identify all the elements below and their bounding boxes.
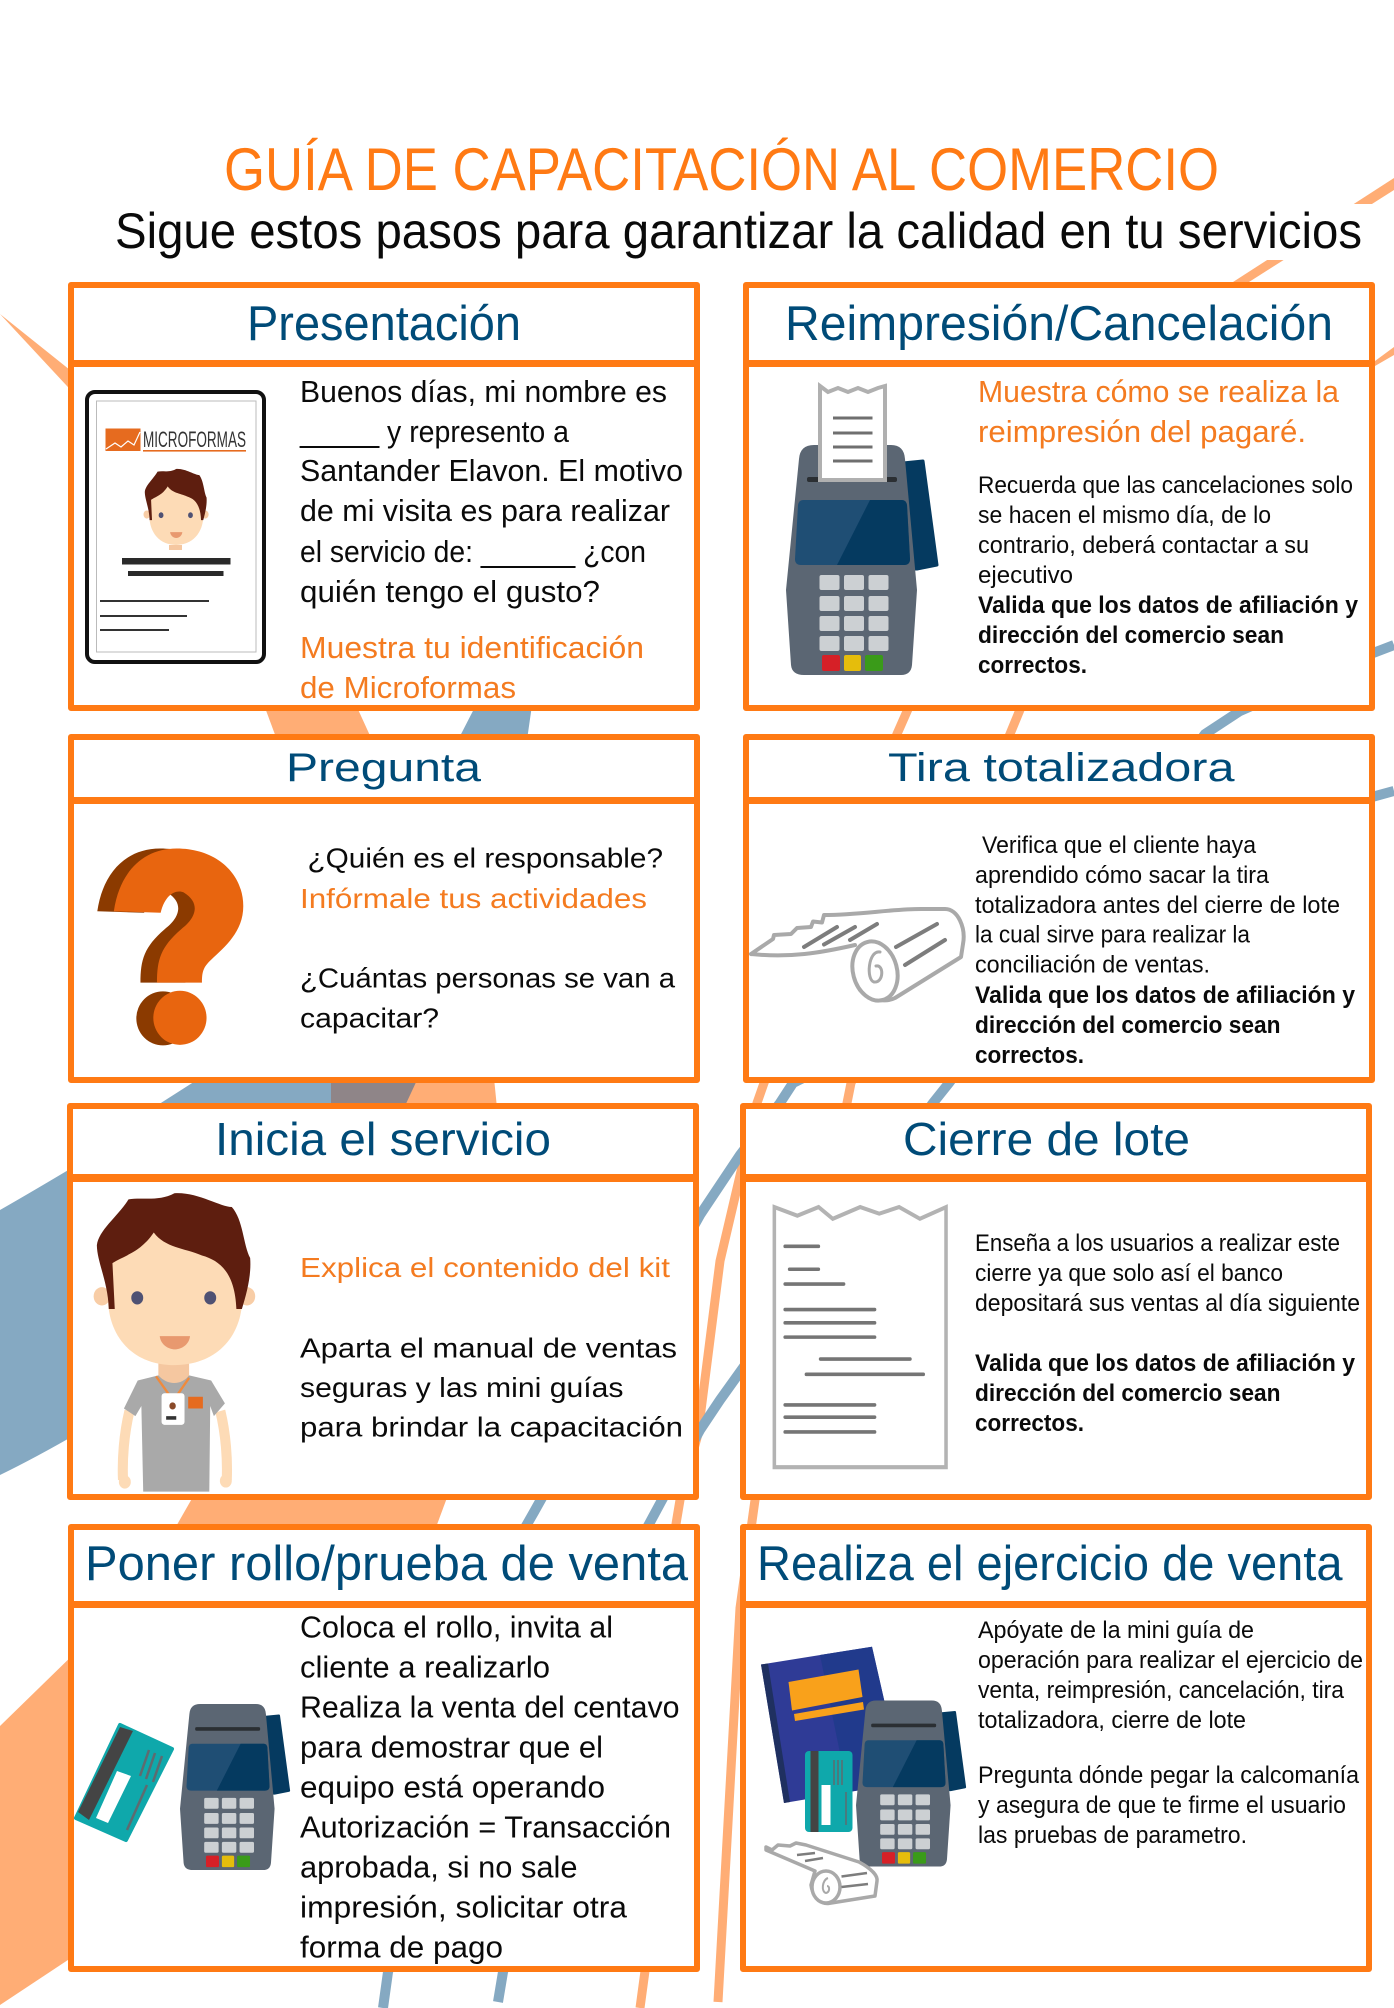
text: sale exercise: Pregunta dónde pegar la calcomanía — [978, 1762, 1360, 1789]
text: kit explanation: seguras y las mini guías — [300, 1372, 624, 1403]
text: roll and test sale: Realiza la venta del centavo — [300, 1690, 680, 1724]
icon: terminal — [180, 1704, 289, 1870]
icon: terminal with receipt — [786, 386, 937, 675]
panel: Cierre de lote — [740, 1106, 1372, 1497]
icon: receipt — [774, 1207, 946, 1467]
text: reprint instructions: dirección del comercio sean — [978, 622, 1284, 649]
icon: ID card — [87, 392, 264, 662]
text: roll and test sale: Autorización = Transacción — [300, 1810, 671, 1844]
text: roll instructions: totalizadora antes del cierre de lote — [975, 892, 1340, 919]
text: reprint instructions: reimpresión del pagaré. — [978, 414, 1306, 449]
icon: kit with guide, card, terminal and roll — [761, 1647, 965, 1904]
text: sale exercise: y asegura de que te firme el usuario — [978, 1792, 1346, 1819]
text: batch close instructions: Enseña a los usuarios a realizar este — [975, 1230, 1340, 1257]
text: sale exercise: totalizadora, cierre de lote — [978, 1707, 1246, 1734]
text: roll and test sale: cliente a realizarlo — [300, 1650, 550, 1684]
text: roll instructions: conciliación de ventas. — [975, 952, 1210, 978]
text: sale exercise: Apóyate de la mini guía de — [978, 1617, 1254, 1644]
text: reprint instructions: Recuerda que las cancelaciones solo — [978, 472, 1353, 499]
text: reprint instructions: contrario, deberá contactar a su — [978, 532, 1309, 559]
text: reprint instructions — [978, 374, 1359, 679]
text: greeting script: Muestra tu identificación — [300, 630, 644, 665]
text: batch close instructions: dirección del comercio sean — [975, 1380, 1280, 1407]
text: roll instructions: Valida que los datos de afiliación y — [975, 982, 1356, 1009]
text: roll and test sale: Coloca el rollo, invita al — [300, 1610, 613, 1644]
text: roll instructions: dirección del comercio sean — [975, 1012, 1280, 1039]
text: roll and test sale: para demostrar que el — [300, 1730, 603, 1764]
heading: Tira totalizadora: Tira totalizadora — [888, 746, 1235, 790]
title: GUÍA DE CAPACITACIÓN AL COMERCIO — [224, 136, 1219, 203]
heading: Realiza el ejercicio de venta: Realiza el ejercicio de venta — [757, 1537, 1343, 1591]
heading: Cierre de lote: Cierre de lote — [903, 1113, 1190, 1165]
text: greeting script: el servicio de: ______ ¿con — [300, 534, 646, 569]
icon: ID card: MICROFORMAS — [143, 427, 246, 452]
text: reprint instructions: Valida que los datos de afiliación y — [978, 592, 1359, 619]
text: roll and test sale — [300, 1610, 680, 1964]
text: questions — [300, 842, 675, 1034]
icon: paper roll — [751, 909, 964, 1006]
panel: Presentación — [68, 285, 700, 708]
subtitle: Sigue estos pasos para garantizar la calidad en tu servicios — [115, 203, 1362, 259]
text: batch close instructions — [975, 1230, 1360, 1437]
icon: question mark — [97, 849, 243, 1045]
text: greeting script: quién tengo el gusto? — [300, 574, 600, 609]
text: roll and test sale: equipo está operando — [300, 1770, 605, 1804]
text: roll and test sale: forma de pago — [300, 1930, 503, 1964]
text: sale exercise: las pruebas de parametro. — [978, 1822, 1247, 1849]
text: batch close instructions: correctos. — [975, 1410, 1084, 1437]
heading: Presentación: Presentación — [247, 297, 521, 351]
panel: Pregunta — [68, 737, 700, 1080]
text: batch close instructions: depositará sus ventas al día siguiente — [975, 1290, 1360, 1317]
text: kit explanation — [300, 1252, 683, 1442]
text: batch close instructions: Valida que los datos de afiliación y — [975, 1350, 1356, 1377]
text: reprint instructions: se hacen el mismo día, de lo — [978, 502, 1271, 529]
text: roll and test sale: impresión, solicitar otra — [300, 1890, 628, 1924]
heading: Reimpresión/Cancelación: Reimpresión/Cancelación — [785, 297, 1333, 351]
text: questions: ¿Quién es el responsable? — [308, 842, 663, 874]
text: sale exercise — [978, 1617, 1363, 1849]
text: sale exercise: venta, reimpresión, cancelación, tira — [978, 1677, 1345, 1704]
text: reprint instructions: Muestra cómo se realiza la — [978, 374, 1340, 409]
panel: Inicia el servicio — [67, 1106, 699, 1497]
text: questions: ¿Cuántas personas se van a — [300, 962, 675, 994]
text: greeting script: Santander Elavon. El motivo — [300, 453, 683, 488]
text: greeting script — [299, 374, 683, 705]
heading: Pregunta: Pregunta — [286, 746, 482, 790]
text: greeting script: de Microformas — [300, 670, 516, 705]
panel: Poner rollo/prueba de venta — [68, 1527, 700, 1969]
text: sale exercise: operación para realizar el ejercicio de — [978, 1647, 1363, 1674]
text: greeting script: _____ y represento a — [299, 414, 570, 449]
text: kit explanation: Explica el contenido del kit — [300, 1252, 670, 1283]
icon: card — [76, 1725, 172, 1840]
text: questions: Infórmale tus actividades — [300, 883, 647, 914]
text: roll instructions: Verifica que el cliente haya — [982, 832, 1257, 859]
heading: Poner rollo/prueba de venta: Poner rollo/prueba de venta — [85, 1537, 689, 1591]
text: roll instructions: aprendido cómo sacar la tira — [975, 862, 1270, 889]
text: reprint instructions: correctos. — [978, 652, 1087, 679]
panel: Reimpresión/Cancelación — [743, 285, 1375, 708]
text: greeting script: Buenos días, mi nombre es — [300, 374, 667, 409]
text: roll instructions: correctos. — [975, 1042, 1084, 1069]
panel: Realiza el ejercicio de venta — [740, 1527, 1372, 1969]
text: roll and test sale: aprobada, si no sale — [300, 1850, 578, 1884]
text: questions: capacitar? — [300, 1002, 439, 1034]
text: kit explanation: Aparta el manual de ventas — [300, 1332, 677, 1364]
heading: Inicia el servicio: Inicia el servicio — [215, 1113, 551, 1165]
text: batch close instructions: cierre ya que solo así el banco — [975, 1260, 1283, 1287]
text: reprint instructions: ejecutivo — [978, 562, 1073, 589]
text: roll instructions: la cual sirve para realizar la — [975, 922, 1251, 948]
text: greeting script: de mi visita es para realizar — [300, 493, 670, 528]
text: roll instructions — [975, 832, 1356, 1069]
text: kit explanation: para brindar la capacitación — [300, 1412, 683, 1442]
icon: technician — [94, 1193, 255, 1492]
panel: Tira totalizadora — [743, 737, 1375, 1080]
